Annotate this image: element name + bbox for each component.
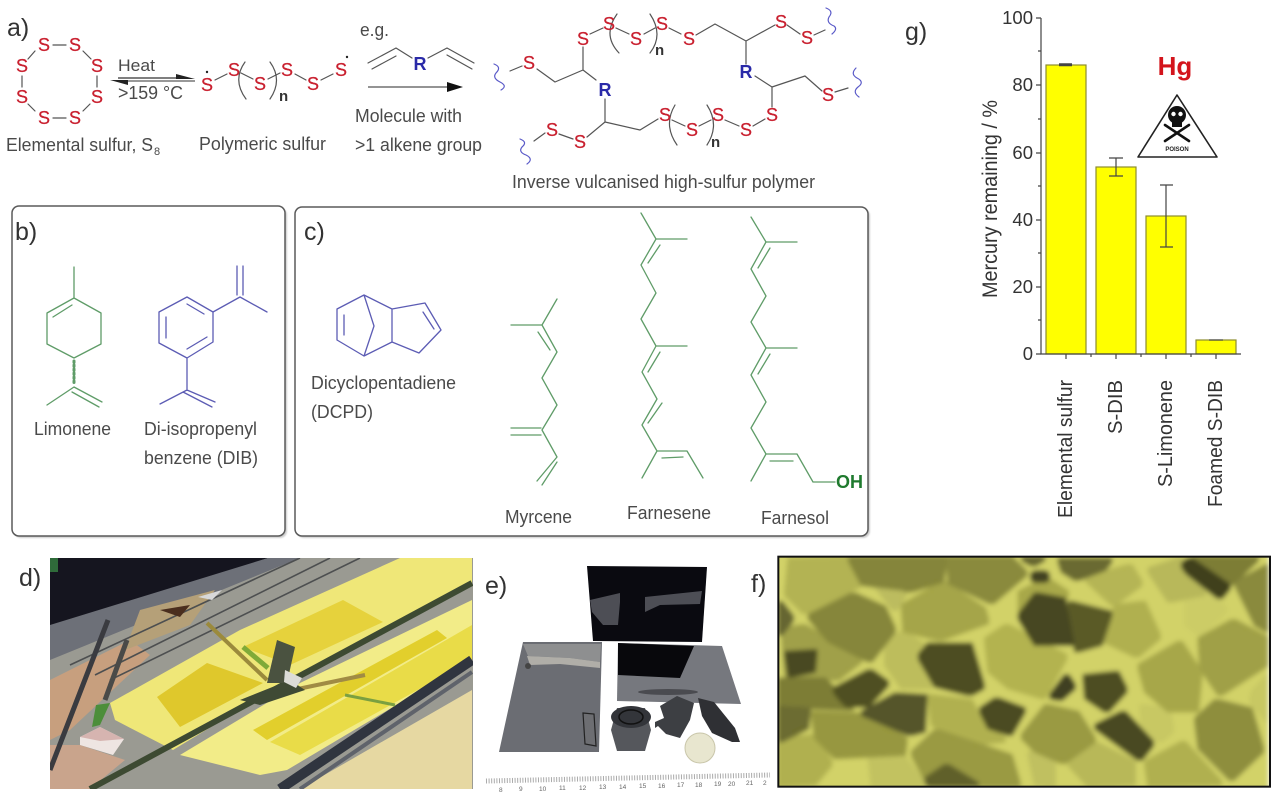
- photo e: polymer samples: [486, 566, 770, 794]
- S8 ring structure: S: [69, 108, 81, 128]
- y tick labels: 80: [1012, 74, 1033, 95]
- label d: d): [19, 564, 41, 592]
- panel g: mercury bar chart: [905, 7, 1241, 518]
- category labels: [1055, 380, 1227, 518]
- inverse vulcanised polymer structure: n: [655, 42, 664, 59]
- leaf shapes: [655, 696, 740, 742]
- inverse vulcanised polymer structure: S: [766, 105, 778, 125]
- polymeric sulfur structure: S: [254, 74, 266, 94]
- ruler: 10: [539, 786, 547, 793]
- equilibrium arrows: [110, 74, 195, 85]
- category labels: S-DIB: [1105, 380, 1127, 434]
- ruler: 19: [714, 781, 722, 788]
- bars: [1046, 65, 1236, 354]
- ruler: 8: [499, 787, 503, 794]
- caption: polymeric sulfur: Polymeric sulfur: [199, 134, 326, 154]
- ruler: 15: [639, 783, 647, 790]
- y tick labels: 0: [1023, 343, 1033, 364]
- inverse vulcanised polymer structure: S: [523, 53, 535, 73]
- inverse vulcanised polymer structure: S: [686, 120, 698, 140]
- myrcene structure: [511, 299, 557, 485]
- label f: f): [751, 570, 766, 598]
- inverse vulcanised polymer structure: S: [775, 12, 787, 32]
- caption: DCPD: [311, 373, 456, 422]
- ruler: [486, 775, 770, 794]
- caption: polymer: Inverse vulcanised high-sulfur polymer: [512, 172, 815, 192]
- moulded cup: [611, 706, 651, 751]
- S8 ring structure: [16, 35, 103, 128]
- ruler: 2: [763, 780, 767, 787]
- reaction arrow: [368, 82, 463, 92]
- axes and ticks: [1036, 18, 1241, 359]
- S8 ring structure: S: [91, 56, 103, 76]
- diene molecule with R: [368, 48, 474, 74]
- farnesene structure: [641, 213, 703, 478]
- label g: g): [905, 18, 927, 46]
- text: Heat: Heat: [118, 56, 155, 75]
- category labels: S-Limonene: [1155, 380, 1177, 487]
- inverse vulcanised polymer structure: n: [711, 134, 720, 151]
- ruler: 16: [658, 783, 666, 790]
- polymeric sulfur structure: S: [201, 75, 213, 95]
- caption: molecule with: Molecule with: [355, 106, 462, 126]
- ruler: 18: [695, 782, 703, 789]
- DIB structure: [159, 266, 267, 407]
- inverse vulcanised polymer structure: R: [598, 80, 612, 100]
- inverse vulcanised polymer structure: S: [712, 105, 724, 125]
- limonene structure: [47, 267, 102, 407]
- diene molecule with R: R: [414, 54, 426, 74]
- text: temperature: >159 °C: [118, 83, 183, 103]
- inverse vulcanised polymer structure: S: [659, 105, 671, 125]
- caption: elemental sulfur: Elemental sulfur, S: [6, 135, 153, 155]
- polymeric sulfur structure: S: [307, 74, 319, 94]
- y tick labels: 60: [1012, 142, 1033, 163]
- inverse vulcanised polymer structure: S: [683, 29, 695, 49]
- inverse vulcanised polymer structure: S: [801, 28, 813, 48]
- inverse vulcanised polymer structure: [494, 8, 861, 164]
- inverse vulcanised polymer structure: S: [546, 120, 558, 140]
- panel b: Limonene and DIB: [12, 206, 287, 538]
- photo f: foam SEM micrograph: [770, 550, 1271, 797]
- ruler: 12: [579, 785, 587, 792]
- coin: [685, 733, 715, 763]
- polymeric sulfur structure: S: [281, 60, 293, 80]
- polymeric sulfur structure: [201, 56, 348, 105]
- caption: limonene: Limonene: [34, 419, 111, 439]
- polymeric sulfur structure: n: [279, 88, 288, 105]
- caption: subscript 8: 8: [154, 146, 160, 158]
- S8 ring structure: S: [38, 108, 50, 128]
- inverse vulcanised polymer structure: S: [822, 85, 834, 105]
- inverse vulcanised polymer structure: S: [630, 29, 642, 49]
- inverse vulcanised polymer structure: S: [574, 132, 586, 152]
- label e: e): [485, 572, 507, 600]
- panel a: inverse vulcanisation scheme: [6, 8, 861, 192]
- caption: DIB: benzene (DIB): [144, 448, 258, 468]
- S8 ring structure: S: [38, 35, 50, 55]
- ruler: 17: [677, 782, 685, 789]
- inverse vulcanised polymer structure: S: [740, 120, 752, 140]
- S8 ring structure: S: [69, 35, 81, 55]
- caption: myrcene: Myrcene: [505, 507, 572, 527]
- icon: poison warning sign: POISON: [1165, 147, 1189, 153]
- label OH: OH: [836, 472, 863, 492]
- inverse vulcanised polymer structure: R: [740, 62, 752, 82]
- caption: alkene group: >1 alkene group: [355, 135, 482, 155]
- ruler: 11: [559, 785, 566, 792]
- label a: a): [7, 14, 29, 42]
- right sheet: [617, 643, 741, 704]
- polymeric sulfur structure: S: [335, 60, 347, 80]
- caption: DCPD: Dicyclopentadiene: [311, 373, 456, 393]
- category labels: Elemental sulfur: [1055, 380, 1077, 518]
- label b: b): [15, 218, 37, 246]
- caption: DCPD: (DCPD): [311, 402, 373, 422]
- y axis title: Mercury remaining / %: [979, 100, 1002, 298]
- ruler: 20: [728, 781, 736, 788]
- y tick labels: 100: [1002, 7, 1033, 28]
- farnesol structure: [751, 217, 835, 482]
- DCPD structure: [337, 295, 441, 356]
- grey sheet: [499, 642, 602, 752]
- ruler: 21: [746, 780, 754, 787]
- S8 ring structure: S: [16, 56, 28, 76]
- ruler: 13: [599, 784, 607, 791]
- S8 ring structure: S: [91, 87, 103, 107]
- inverse vulcanised polymer structure: S: [656, 14, 668, 34]
- caption: DIB: [144, 419, 258, 468]
- Hg label: Hg: [1158, 51, 1192, 81]
- y tick labels: [1002, 7, 1033, 364]
- caption: farnesene: Farnesene: [627, 503, 711, 523]
- error bars: [1059, 64, 1223, 340]
- black sheet: [587, 566, 707, 642]
- y tick labels: 40: [1012, 209, 1033, 230]
- caption: DIB: Di-isopropenyl: [144, 419, 257, 439]
- text: e.g.: e.g.: [360, 20, 389, 40]
- label c: c): [304, 218, 325, 246]
- caption: farnesol: Farnesol: [761, 508, 829, 528]
- icon: poison warning sign: [1138, 95, 1217, 157]
- category labels: Foamed S-DIB: [1205, 380, 1227, 507]
- y tick labels: 20: [1012, 276, 1033, 297]
- inverse vulcanised polymer structure: S: [577, 29, 589, 49]
- ruler: 9: [519, 786, 523, 793]
- ruler: 14: [619, 784, 627, 791]
- panel c: DCPD, Myrcene, Farnesene, Farnesol: [295, 207, 870, 538]
- polymeric sulfur structure: S: [228, 60, 240, 80]
- photo d: sulfur stockpile: [50, 558, 473, 789]
- S8 ring structure: S: [16, 87, 28, 107]
- inverse vulcanised polymer structure: S: [603, 14, 615, 34]
